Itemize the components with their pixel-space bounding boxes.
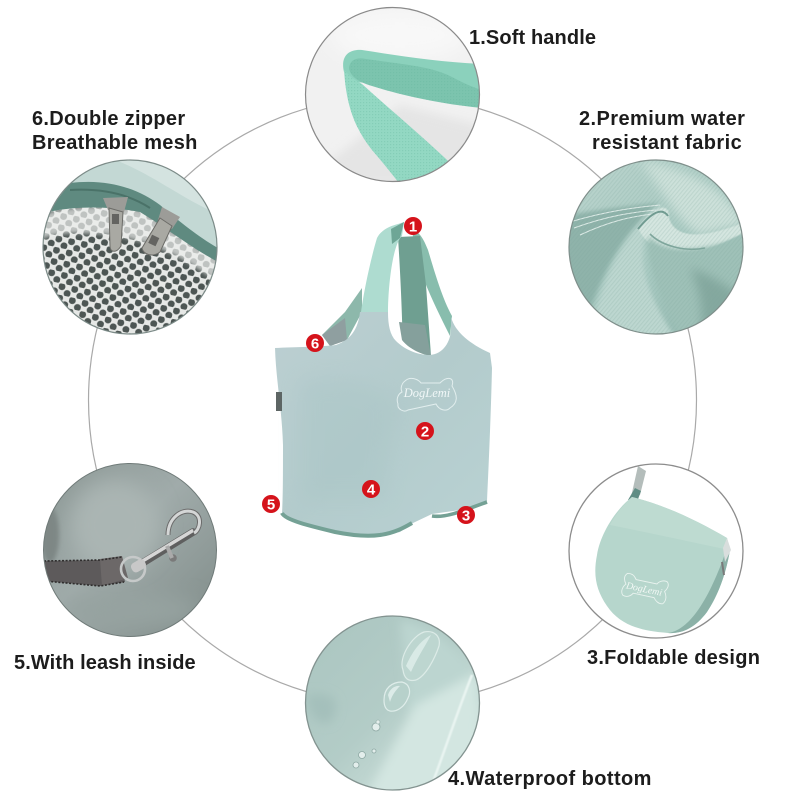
connecting ring <box>88 96 696 704</box>
icon: pouch bone logo: DogLemi <box>624 580 663 599</box>
back handle outer strap <box>412 229 452 336</box>
front handle <box>361 222 404 312</box>
panel: central tote bag <box>262 217 492 537</box>
icon: leash strap <box>44 556 128 586</box>
badge 6 <box>306 334 324 352</box>
icon: folded pouch strap <box>631 466 646 497</box>
panel: foldable design detail <box>569 464 743 638</box>
badge 4: 4 <box>367 482 376 498</box>
panel: soft handle detail <box>304 6 480 182</box>
badge 3 <box>457 506 475 524</box>
bag body <box>275 312 492 537</box>
bag rim trim <box>282 513 412 536</box>
badge 2: 2 <box>421 424 429 440</box>
heading: premium water resistant fabric: resistant fabric <box>592 132 742 154</box>
icon: metal snap hook <box>121 511 200 581</box>
badge 1 <box>404 217 422 236</box>
heading: with leash inside: 5.With leash inside <box>14 652 196 674</box>
icon: folded pouch <box>595 497 730 633</box>
badge 2 <box>416 422 434 440</box>
back handle inner strap <box>398 236 431 356</box>
panel: water resistant fabric detail <box>568 159 744 335</box>
heading: soft handle: 1.Soft handle <box>469 27 596 49</box>
badge 4 <box>362 480 380 498</box>
icon: zipper pull right <box>142 207 180 255</box>
icon: zipper pull left <box>103 197 128 251</box>
icon: pouch bone logo <box>621 573 669 605</box>
badge 3: 3 <box>462 508 470 524</box>
badge 1: 1 <box>409 218 417 236</box>
panel: leash inside detail <box>41 464 216 636</box>
badge 5 <box>262 495 280 514</box>
side label tag <box>276 392 282 411</box>
badge 6: 6 <box>311 336 319 352</box>
panel: double zipper breathable mesh detail <box>40 155 220 340</box>
badge 5: 5 <box>267 496 275 514</box>
panel: waterproof bottom detail <box>306 616 480 800</box>
heading: foldable design: 3.Foldable design <box>587 647 760 669</box>
heading: waterproof bottom: 4.Waterproof bottom <box>448 768 652 790</box>
bone logo: DogLemi <box>403 386 451 400</box>
heading: double zipper breathable mesh: 6.Double zipper <box>32 108 185 130</box>
icon: water drops <box>353 632 439 768</box>
back lower strap <box>322 288 362 346</box>
bone logo <box>397 378 456 411</box>
heading: double zipper breathable mesh: Breathable mesh <box>32 132 198 154</box>
heading: premium water resistant fabric: 2.Premium water <box>579 108 745 130</box>
